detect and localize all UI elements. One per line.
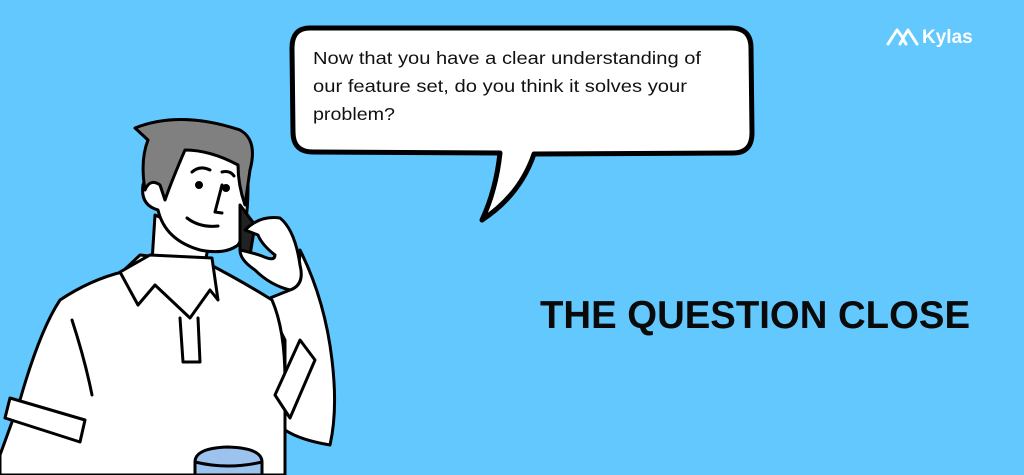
bubble text (313, 48, 701, 124)
collar (120, 255, 218, 318)
hair (135, 119, 252, 205)
head (143, 140, 248, 252)
hand (240, 218, 301, 290)
bubble text: problem? (313, 104, 395, 124)
torso / shirt (0, 255, 285, 475)
phone (240, 205, 255, 255)
speech bubble (292, 28, 752, 220)
bubble text: our feature set, do you think it solves your (313, 76, 687, 96)
logo: Kylas: Kylas (922, 27, 973, 48)
placket (180, 318, 200, 362)
logo: Kylas (888, 27, 973, 48)
right sleeve (275, 340, 315, 418)
title: THE QUESTION CLOSE (540, 294, 970, 337)
raised arm (265, 250, 335, 445)
left sleeve band (5, 398, 85, 442)
eyes (196, 182, 202, 188)
neck (152, 215, 210, 271)
man illustration (0, 119, 335, 475)
bubble text: Now that you have a clear understanding of (313, 48, 701, 68)
cup (195, 447, 262, 475)
